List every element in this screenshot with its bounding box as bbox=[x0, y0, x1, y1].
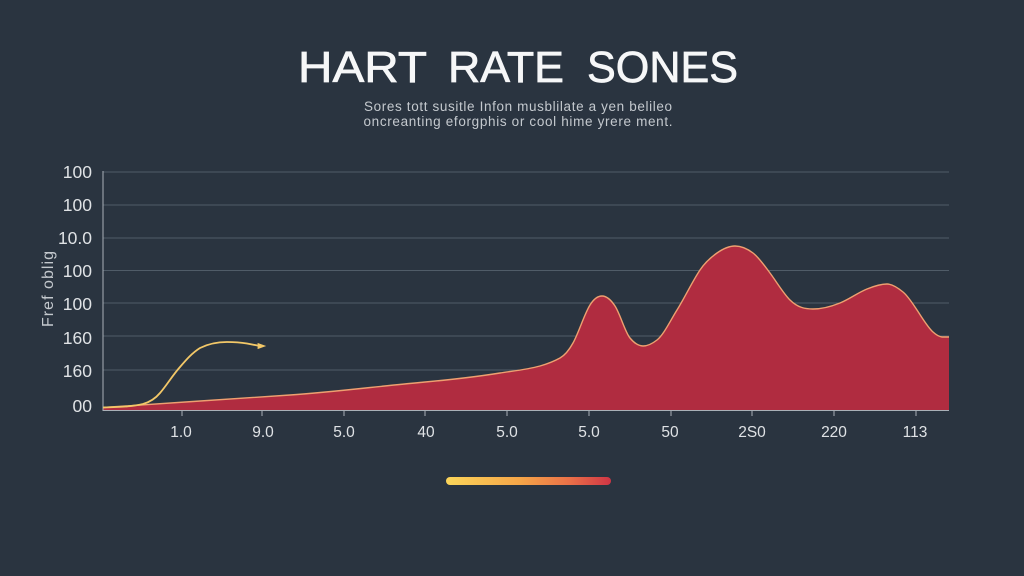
x axis labels: 1.0 bbox=[170, 424, 192, 441]
y axis labels: 10.0 bbox=[58, 228, 92, 248]
x axis labels: 5.0 bbox=[333, 424, 355, 441]
x axis labels: 5.0 bbox=[578, 424, 600, 441]
yellow arrow line bbox=[103, 342, 265, 408]
x axis labels: 9.0 bbox=[252, 424, 274, 441]
subtitle: Sores tott susitle Infon musblilate a yen belileo bbox=[364, 99, 672, 114]
chart bbox=[40, 162, 949, 441]
subtitle bbox=[364, 99, 672, 129]
grid lines bbox=[103, 172, 949, 370]
y axis labels: 100 bbox=[63, 261, 92, 281]
y axis labels: 100 bbox=[63, 162, 92, 182]
x axis labels: 220 bbox=[821, 424, 847, 441]
x axis labels bbox=[170, 424, 927, 441]
y axis labels: 160 bbox=[63, 361, 92, 381]
y axis labels: 160 bbox=[63, 328, 92, 348]
gradient legend bar bbox=[446, 477, 611, 485]
title: RATE bbox=[448, 43, 564, 92]
y axis labels: 100 bbox=[63, 294, 92, 314]
y axis title: Fref oblig bbox=[40, 251, 57, 327]
title: SONES bbox=[587, 43, 738, 92]
axes bbox=[103, 171, 949, 416]
title: HART bbox=[298, 43, 427, 92]
title bbox=[298, 43, 738, 92]
y axis labels bbox=[58, 162, 92, 416]
subtitle: oncreanting eforgphis or cool hime yrere ment. bbox=[364, 114, 672, 129]
x axis labels: 50 bbox=[661, 424, 679, 441]
x axis labels: 5.0 bbox=[496, 424, 518, 441]
x axis labels: 113 bbox=[903, 424, 927, 441]
x axis labels: 40 bbox=[417, 424, 435, 441]
orange area outline bbox=[103, 246, 949, 408]
y axis labels: 00 bbox=[73, 396, 92, 416]
y axis labels: 100 bbox=[63, 195, 92, 215]
x axis labels: 2S0 bbox=[738, 424, 766, 441]
red area series bbox=[103, 246, 949, 410]
